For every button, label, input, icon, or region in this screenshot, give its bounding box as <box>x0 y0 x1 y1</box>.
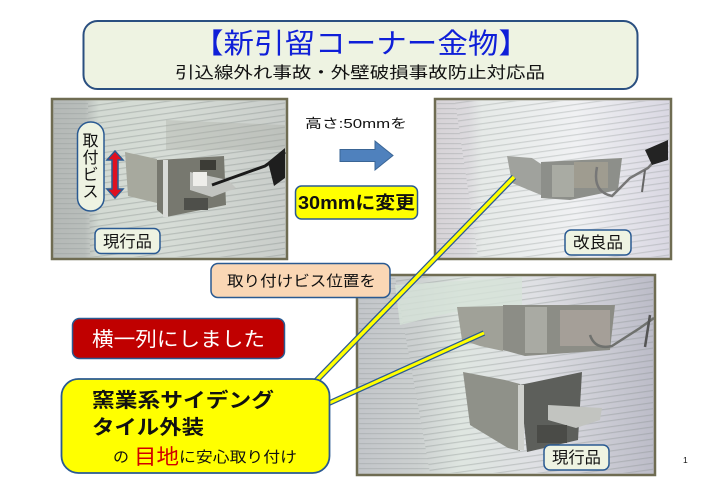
callout: screw position <box>211 264 390 298</box>
photo: current product, single bracket <box>52 99 287 259</box>
leader line to stacked photo <box>325 333 484 405</box>
icon: double-headed red height arrow <box>107 151 123 198</box>
callout heading line 1: 窯業系サイデング <box>92 388 274 412</box>
callout: changed to 30mm <box>296 186 418 219</box>
banner: arranged in one horizontal row: 横一列にしました <box>92 328 265 351</box>
label: current product <box>95 228 160 254</box>
banner: arranged in one horizontal row <box>72 318 284 358</box>
callout body line: の <box>113 449 129 466</box>
label: current product: 現行品 <box>103 233 152 251</box>
label: current product, stacked photo: 現行品 <box>552 449 601 467</box>
callout body line: 目地 <box>134 446 179 469</box>
arrow: change to the right <box>340 141 393 170</box>
text: height 50mm: 高さ:50mmを <box>305 116 407 131</box>
page number: 1 <box>683 455 688 465</box>
subtitle: 引込線外れ事故・外壁破損事故防止対応品 <box>175 64 545 82</box>
label: mounting screws pill <box>78 122 104 211</box>
callout: siding and tile installation <box>62 379 330 473</box>
label: mounting screws pill: ス <box>82 184 99 201</box>
label: mounting screws pill: 付 <box>82 149 99 167</box>
label: mounting screws pill: 取 <box>82 133 99 150</box>
title panel <box>84 21 638 89</box>
callout: screw position: 取り付けビス位置を <box>227 273 376 290</box>
main title: 【新引留コーナー金物】 <box>193 28 529 59</box>
label: mounting screws pill: ビ <box>82 166 99 184</box>
photo: improved and current products stacked <box>357 275 655 475</box>
leader line to improved photo <box>315 177 514 382</box>
callout body line: に安心取り付け <box>179 449 297 466</box>
callout heading line 2: タイル外装 <box>92 416 204 439</box>
photo: improved product <box>435 99 671 259</box>
label: current product, stacked photo <box>544 445 609 470</box>
label: improved product <box>565 230 631 255</box>
callout: changed to 30mm: 30mmに変更 <box>298 193 415 213</box>
callout body line <box>113 446 297 469</box>
label: improved product: 改良品 <box>573 234 623 252</box>
